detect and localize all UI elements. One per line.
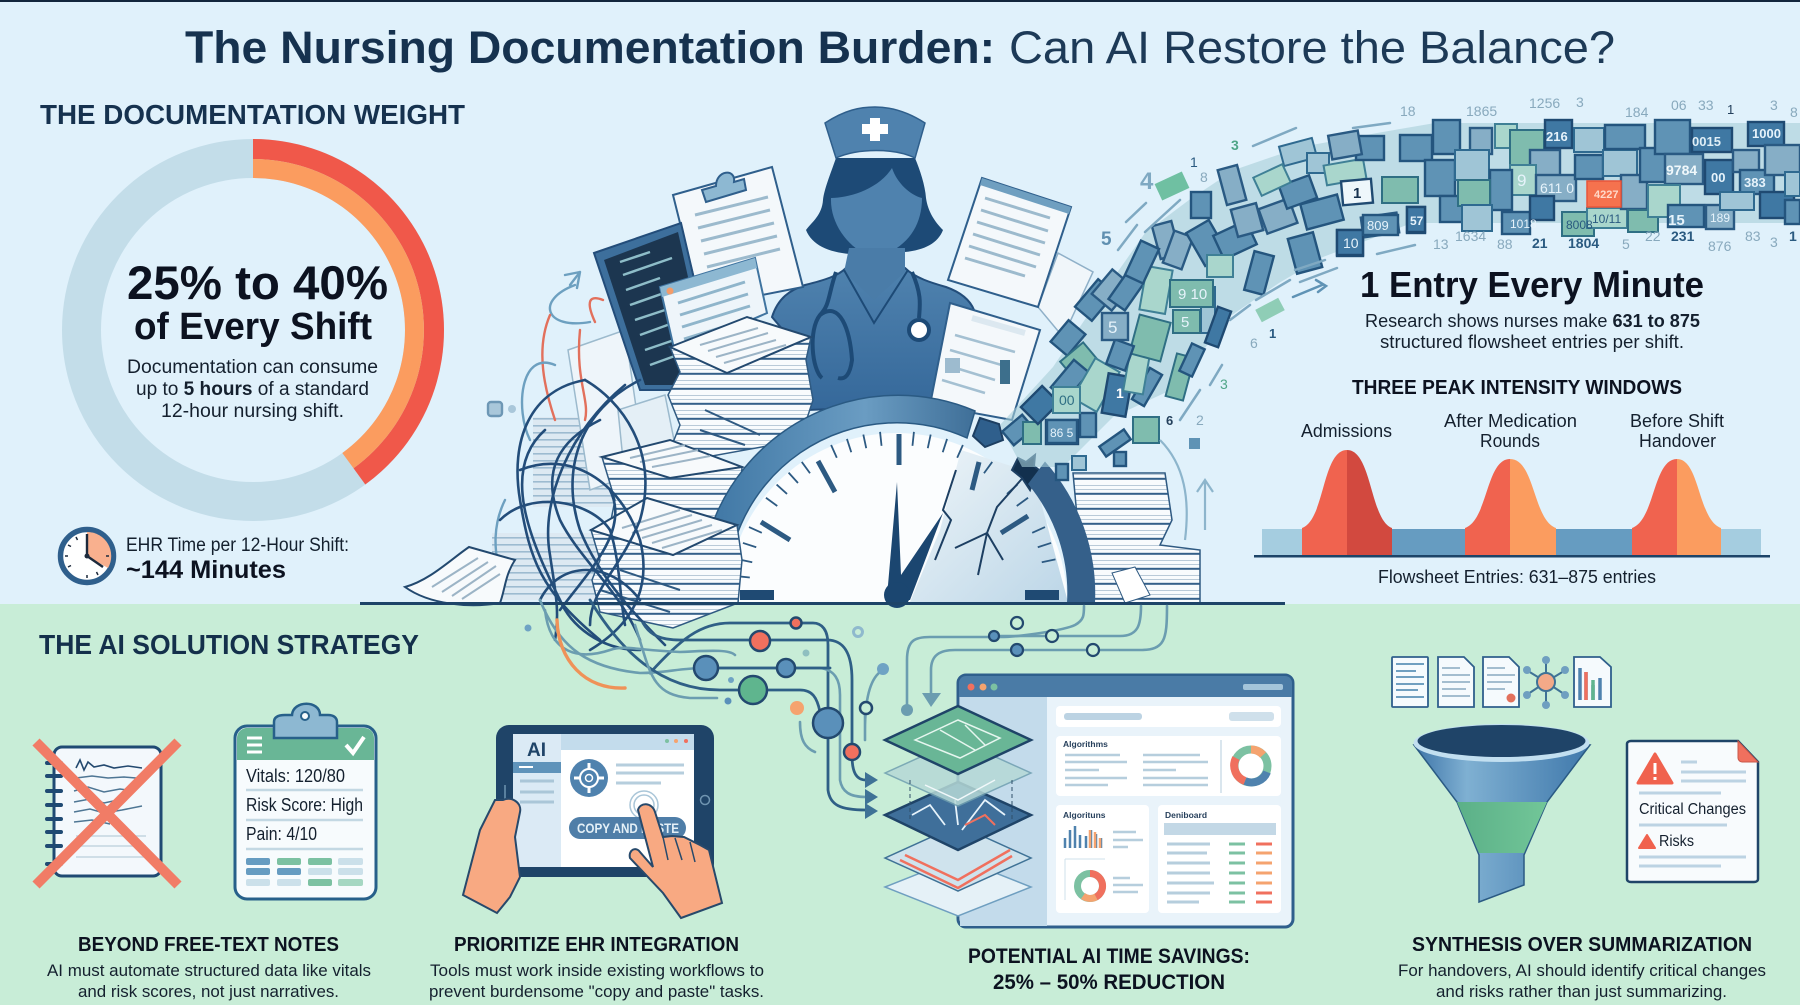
stat: EHR time per shift [126, 534, 349, 584]
title: The Nursing Documentation Burden: [185, 22, 995, 73]
peak labels: Admissions [1301, 421, 1392, 441]
ribbon loose numbers: 876 [1708, 238, 1732, 254]
ribbon loose numbers: 8 [1790, 104, 1798, 120]
monitor [594, 223, 720, 390]
nurse figure [772, 107, 974, 410]
ribbon figures: 57 [1410, 214, 1424, 228]
tangled wires [500, 380, 665, 650]
layer: dark network [885, 782, 1031, 850]
clock face [727, 433, 1067, 603]
ribbon figures: 383 [1744, 175, 1766, 190]
clock rim [700, 395, 975, 603]
donut description: 12-hour nursing shift. [161, 401, 344, 422]
integration description: Tools must work inside existing workflows to [430, 961, 764, 980]
title: Can AI Restore the Balance? [1009, 22, 1615, 73]
ribbon figures: 00 [1059, 392, 1075, 408]
peak labels: Rounds [1480, 431, 1540, 451]
data entry ribbon [1000, 94, 1800, 540]
ribbon loose numbers: 1 [1190, 154, 1198, 170]
ribbon figures: 5 [1108, 318, 1117, 337]
icon: critical changes document: Critical Changes [1639, 801, 1746, 818]
top edge line [0, 0, 1800, 2]
dashboard card: charts [1056, 805, 1149, 913]
ribbon figures: 189 [1710, 211, 1730, 225]
free-text description: and risk scores, not just narratives. [78, 982, 339, 1001]
entry description: structured flowsheet entries per shift. [1380, 331, 1684, 352]
icon: funnel [1414, 724, 1590, 902]
ribbon loose numbers: 1 [1269, 326, 1276, 341]
integration description: prevent burdensome "copy and paste" tasks. [429, 982, 764, 1001]
integration heading: PRIORITIZE EHR INTEGRATION [454, 933, 739, 956]
paper stack: middle [602, 440, 742, 530]
ribbon figures: 4227 [1594, 189, 1618, 201]
donut segment: 40 percent [253, 139, 444, 484]
dashboard card: table [1158, 805, 1281, 913]
ribbon figures: 216 [1546, 129, 1568, 144]
panel: beyond free-text notes [36, 704, 376, 1001]
clipboard data cells [246, 858, 363, 886]
peak labels: Before Shift [1630, 411, 1724, 431]
ribbon loose numbers: 22 [1645, 228, 1661, 244]
dashboard card: table: Deniboard [1165, 810, 1207, 820]
peak heading: THREE PEAK INTENSITY WINDOWS [1352, 377, 1682, 399]
circuit: upper right connections [901, 606, 1167, 716]
nurse neckline [844, 270, 908, 323]
chart caption: Flowsheet Entries: 631–875 entries [1378, 567, 1656, 587]
layer: green top [885, 706, 1031, 774]
clock right rim fragment [1028, 462, 1095, 603]
free-text heading: BEYOND FREE-TEXT NOTES [78, 933, 339, 956]
clipboard field values: Vitals: 120/80 [246, 766, 345, 786]
entry description [1365, 310, 1700, 352]
free-text description: AI must automate structured data like vitals [47, 961, 371, 980]
ribbon loose numbers: 1256 [1529, 95, 1560, 111]
panel: potential AI time savings [885, 675, 1293, 994]
ribbon loose numbers: 2 [1196, 412, 1204, 428]
panel: donut chart with shift share [82, 139, 444, 502]
background: lower green section [0, 604, 1800, 1005]
nurse cap cross [862, 118, 888, 141]
paper stack: top centre [668, 317, 813, 460]
peak labels: After Medication [1444, 411, 1577, 431]
ribbon loose numbers: 231 [1671, 228, 1695, 244]
synthesis description: For handovers, AI should identify critical changes [1398, 961, 1766, 980]
savings heading: 25% – 50% REDUCTION [993, 971, 1225, 994]
ribbon base [1000, 123, 1800, 467]
ribbon loose numbers: 3 [1231, 137, 1239, 153]
ribbon loose numbers: 21 [1532, 235, 1548, 251]
icon: tablet with AI app: COPY AND PASTE [577, 821, 679, 836]
ribbon loose numbers: 18 [1400, 103, 1416, 119]
panel: prioritize EHR integration [429, 725, 764, 1001]
clock minute ticks [736, 432, 1055, 578]
panel: synthesis over summarization [1392, 656, 1766, 1001]
icon: hub network [1523, 656, 1569, 709]
ribbon loose numbers: 8 [1200, 169, 1208, 185]
donut subtitle: of Every Shift [134, 306, 372, 348]
entry heading: 1 Entry Every Minute [1360, 264, 1704, 305]
ribbon figures: 9 [1517, 171, 1526, 190]
icon: right hand pointing [630, 804, 722, 918]
ribbon loose numbers: 33 [1698, 97, 1714, 113]
clipboard field values: Pain: 4/10 [246, 824, 317, 844]
donut segment: 25 percent band [253, 159, 424, 468]
circuit lines [540, 600, 880, 810]
circuit dots [524, 624, 889, 715]
dashboard top bar [1056, 706, 1281, 727]
donut description [127, 357, 378, 422]
peak chart [1254, 450, 1770, 558]
ribbon loose numbers [1101, 94, 1798, 540]
loose sheet [405, 547, 515, 605]
ribbon loose numbers: 13 [1433, 236, 1449, 252]
ribbon loose numbers: 184 [1625, 104, 1649, 120]
ribbon loose numbers: 88 [1497, 236, 1513, 252]
icon: critical changes document [1627, 741, 1758, 882]
ribbon figures: 1 [1353, 185, 1361, 202]
ribbon blocks: lower section [1002, 131, 1425, 480]
donut description: Documentation can consume [127, 357, 378, 378]
ribbon loose numbers: 1634 [1455, 228, 1486, 244]
donut description: up to 5 hours of a standard [136, 379, 369, 400]
clipboard field values: Risk Score: High [246, 795, 363, 815]
window sheet [660, 258, 767, 353]
circuit connections from tangle to stack [524, 600, 889, 819]
icon row: source documents [1392, 657, 1611, 707]
circuit arrowheads [865, 772, 878, 819]
ribbon figures: 611 0 [1540, 180, 1574, 196]
free-text description [47, 961, 371, 1001]
icon: critical changes document: Risks [1659, 833, 1694, 850]
stat: EHR time per shift: ~144 Minutes [126, 556, 286, 584]
icon: crossed out notebook [36, 742, 178, 885]
panel: one entry every minute [1360, 264, 1704, 352]
donut big figure: 25% to 40% [127, 256, 388, 309]
dashboard card: charts: Algorituns [1063, 810, 1106, 820]
ribbon loose numbers: 3 [1220, 376, 1228, 392]
ribbon figures: 5 [1181, 314, 1189, 331]
ribbon figures: 9784 [1666, 162, 1697, 178]
ribbon loose numbers: 3 [1576, 94, 1584, 110]
icon: stacked data layers [885, 706, 1031, 916]
integration description [429, 961, 764, 1001]
ribbon loose numbers: 1 [1789, 228, 1797, 244]
ribbon figures: 1018 [1510, 217, 1537, 231]
ribbon loose numbers: 1865 [1466, 103, 1497, 119]
ribbon figures: 0015 [1692, 134, 1721, 149]
ribbon loose numbers: 6 [1250, 335, 1258, 351]
stat: EHR time per shift: EHR Time per 12-Hour Shift: [126, 534, 349, 556]
clock cracked glass [910, 450, 1068, 602]
ribbon loose numbers: 4 [1140, 168, 1154, 195]
ribbon loose numbers: 5 [1622, 236, 1630, 252]
paper stack: front left [591, 498, 742, 628]
icon: structured clipboard [235, 704, 376, 899]
title [185, 22, 1615, 73]
nurse body [772, 268, 974, 410]
dashboard card: algorithms [1056, 736, 1281, 796]
ribbon loose numbers: 1804 [1568, 235, 1599, 251]
ribbon figures: 1 [1116, 385, 1124, 401]
baseline [360, 602, 1285, 605]
icon: tablet with AI app [496, 725, 714, 877]
synthesis heading: SYNTHESIS OVER SUMMARIZATION [1412, 933, 1752, 956]
ribbon loose numbers: 1 [1727, 102, 1734, 117]
ribbon blocks: upper band [1400, 120, 1800, 236]
ribbon loose numbers: 83 [1745, 228, 1761, 244]
right book stack [1073, 473, 1200, 603]
front right chart sheet [930, 303, 1040, 420]
ribbon loose numbers: 06 [1671, 97, 1687, 113]
ribbon teal blocks [1047, 172, 1425, 443]
clock hands [885, 482, 943, 600]
left swirl lines [488, 272, 603, 585]
donut ring [82, 158, 424, 502]
back left paper stacks [492, 330, 680, 600]
dashboard card: algorithms: Algorithms [1063, 739, 1108, 749]
illustration: overwhelmed nurse with paperwork [360, 107, 1285, 650]
ribbon figures: 15 [1668, 212, 1685, 229]
clock dial [700, 395, 1095, 608]
ribbon loose numbers: 3 [1770, 97, 1778, 113]
icon: left hand [463, 799, 520, 913]
ribbon figures: 10/11 [1592, 212, 1621, 226]
ribbon loose numbers: 5 [1101, 229, 1112, 250]
synthesis description [1398, 961, 1766, 1001]
ribbon figures: 86 5 [1050, 426, 1074, 440]
layer: paper records [885, 858, 1031, 916]
icon: tablet with AI app: AI [527, 740, 546, 761]
ribbon figures: 9 10 [1178, 286, 1207, 303]
ribbon figures: 1000 [1752, 126, 1781, 141]
background: upper blue section [0, 0, 1800, 604]
stethoscope [813, 272, 929, 378]
panel: three peak intensity windows [1254, 377, 1770, 587]
clock cracks [935, 418, 1044, 575]
right document sheet [948, 178, 1093, 337]
nurse cap [825, 107, 925, 158]
savings heading: POTENTIAL AI TIME SAVINGS: [968, 945, 1250, 968]
ribbon figures: 809 [1367, 218, 1389, 233]
nurse hair [806, 158, 943, 254]
nurse face [831, 168, 922, 258]
icon: small clock [60, 530, 114, 582]
ribbon figures: 00 [1711, 170, 1725, 185]
ribbon loose numbers: 3 [1770, 234, 1778, 250]
layer: warm signals [885, 825, 1031, 891]
circuit nodes [694, 618, 872, 760]
section heading: the documentation weight: THE DOCUMENTATION WEIGHT [40, 99, 465, 130]
peak labels [1301, 411, 1724, 451]
savings heading [968, 945, 1250, 994]
clipboard field values [246, 766, 363, 844]
peak labels: Handover [1639, 431, 1716, 451]
entry description: Research shows nurses make 631 to 875 [1365, 310, 1700, 331]
ribbon figures: 8008 [1566, 218, 1593, 232]
clipboard sheet [673, 167, 803, 307]
section heading: the AI solution strategy: THE AI SOLUTION STRATEGY [39, 629, 419, 660]
ribbon figures [1050, 126, 1781, 440]
layer: translucent [885, 740, 1031, 806]
synthesis description: and risks rather than just summarizing. [1436, 982, 1727, 1001]
ribbon highlighted block [1587, 181, 1621, 207]
ribbon loose numbers: 6 [1166, 413, 1173, 428]
ribbon figures: 10 [1343, 235, 1359, 251]
icon: dashboard window [958, 675, 1293, 927]
clock major ticks [761, 434, 1028, 540]
